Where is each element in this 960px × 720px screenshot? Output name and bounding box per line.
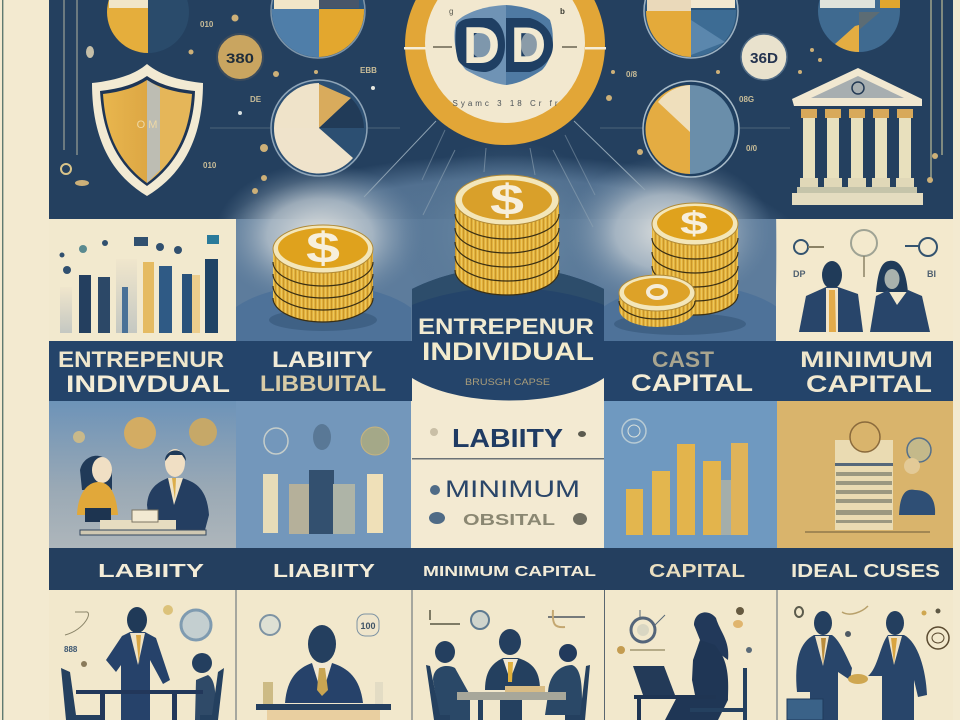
label band: row 2 — [49, 548, 953, 590]
panel: row 3 column 2 seated at desk: 100 — [360, 621, 376, 631]
icon: temple — [792, 68, 923, 205]
small label texts on banner: DE — [250, 95, 262, 104]
label: capital: CAPITAL — [649, 561, 745, 581]
badge: 36D — [741, 34, 787, 80]
heading: labiity: LIBBUITAL — [260, 371, 386, 396]
pie chart: top right — [818, 0, 900, 52]
panel: row 1 column 1 bar chart — [49, 219, 236, 341]
standing man — [106, 607, 170, 720]
chairs — [61, 668, 100, 720]
icon: centre coin stack: $ — [490, 176, 524, 225]
panel: row 2 column 1 meeting scene — [49, 401, 236, 548]
woman — [77, 456, 118, 522]
panel: row 3 column 2 seated at desk — [256, 614, 391, 720]
panel: row 2 column 4 bar chart — [604, 401, 777, 548]
label: liabiity: LIABIITY — [273, 561, 375, 581]
panel: row 2 column 5 report scene — [777, 401, 953, 548]
panel: row 3 column 1 presenter: 888 — [64, 645, 78, 654]
pie chart: top right centre — [644, 0, 738, 58]
small label texts on banner: EBB — [360, 66, 377, 75]
pie chart: lower left — [271, 80, 367, 176]
panel: top navy banner — [49, 0, 953, 219]
panel: row 3 backgrounds — [49, 590, 953, 720]
heading: minimum capital — [800, 347, 933, 398]
badge: 380: 380 — [226, 50, 254, 66]
badge: 380 — [217, 34, 263, 80]
woman — [870, 261, 930, 332]
heading: entrepenur: ENTREPENUR — [418, 314, 594, 339]
small label texts on banner: 0/0 — [746, 144, 758, 153]
man left — [796, 611, 852, 720]
text: obsital: OBSITAL — [463, 512, 555, 529]
chair — [690, 668, 747, 720]
man — [147, 449, 209, 530]
heading: entrepenur individual — [58, 347, 230, 398]
text: labiity: LABIITY — [452, 423, 563, 453]
central emblem — [404, 0, 606, 145]
panel: centre dome heading — [412, 267, 604, 400]
D blobs — [455, 18, 505, 72]
icon: centre coin stack — [455, 175, 559, 295]
icon: tall coin stack — [614, 203, 746, 335]
left person — [426, 641, 470, 720]
label: ideal cuses: IDEAL CUSES — [791, 561, 940, 581]
central emblem: D — [511, 17, 546, 73]
heading: entrepenur individual: ENTREPENUR — [58, 347, 224, 372]
heading: cast capital: CAPITAL — [631, 370, 753, 397]
panel: row 1 column 2 coins — [236, 224, 411, 341]
header band: row 1 labels — [49, 341, 953, 401]
panel: row 2 column 2 faded bars — [236, 401, 411, 548]
small icons — [794, 230, 937, 277]
pie chart: second top — [271, 0, 365, 58]
icon: coin stack: $ — [306, 224, 340, 273]
banner rules and specks — [61, 0, 942, 194]
panel: row 1 column 4 coins — [604, 202, 776, 341]
heading: individual: INDIVIDUAL — [422, 338, 594, 366]
table — [80, 510, 206, 535]
label: labiity: LABIITY — [98, 561, 204, 581]
briefcase — [787, 699, 823, 720]
icon: single coin — [619, 275, 695, 327]
centre person — [485, 629, 540, 690]
badge: 36D: 36D — [750, 50, 778, 67]
icon: coin stack — [269, 224, 377, 331]
woman — [665, 612, 728, 720]
report rows — [835, 463, 893, 523]
heading: labiity — [260, 347, 386, 396]
icon: tall coin stack: $ — [680, 205, 708, 241]
pie chart: lower right — [643, 81, 739, 177]
seated man — [192, 653, 216, 720]
columns — [803, 115, 911, 178]
small label texts on banner: 08G — [739, 95, 754, 104]
panel: row 1 column 5 two figures — [777, 219, 953, 341]
heading: minimum capital: MINIMUM — [800, 347, 933, 372]
laptop — [633, 666, 675, 695]
chart specks — [60, 235, 219, 274]
subheading: BRUSGH CAPSE — [465, 377, 550, 387]
table — [76, 690, 203, 720]
panel: row 3 column 5 handshake — [787, 606, 949, 720]
panel: row 1 column 5 two figures: BI — [927, 269, 936, 279]
label: minimum capital: MINIMUM CAPITAL — [423, 563, 596, 580]
small label texts on banner: 010 — [200, 20, 214, 29]
man right — [868, 611, 927, 720]
text: minimum: MINIMUM — [445, 476, 580, 503]
man — [799, 261, 863, 332]
right person — [545, 644, 590, 720]
desk — [634, 695, 716, 720]
panel: row 2 column 3 text — [412, 378, 604, 548]
icon: shield: O M — [137, 119, 157, 131]
central emblem: b — [560, 7, 565, 16]
pie chart: top left — [107, 0, 189, 53]
central emblem: g — [449, 7, 453, 16]
panel: row 3 column 3 round-table — [426, 610, 590, 720]
handshake — [848, 674, 868, 684]
small label texts on banner: 010 — [203, 161, 217, 170]
panel: row 3 column 1 presenter — [61, 605, 224, 720]
rays below central emblem — [364, 121, 645, 227]
heading: cast capital: CAST — [652, 347, 715, 372]
small label texts on banner: 0/8 — [626, 70, 638, 79]
center radial glow backdrop — [207, 140, 807, 345]
heading: labiity: LABIITY — [272, 347, 373, 372]
heading: cast capital — [631, 347, 753, 397]
small label texts on banner — [200, 20, 758, 170]
heading: minimum capital: CAPITAL — [806, 371, 932, 398]
table — [457, 686, 566, 720]
emblem letters: D — [463, 17, 500, 75]
icon: shield — [92, 64, 203, 196]
heading: entrepenur individual: INDIVDUAL — [66, 371, 230, 398]
decorative gold specks — [61, 14, 938, 194]
panel: row 3 column 4 laptop user — [617, 607, 752, 720]
panel: row 1 column 5 two figures: DP — [793, 269, 806, 279]
central emblem: Syamc 3 18 Cr fr — [452, 99, 558, 108]
